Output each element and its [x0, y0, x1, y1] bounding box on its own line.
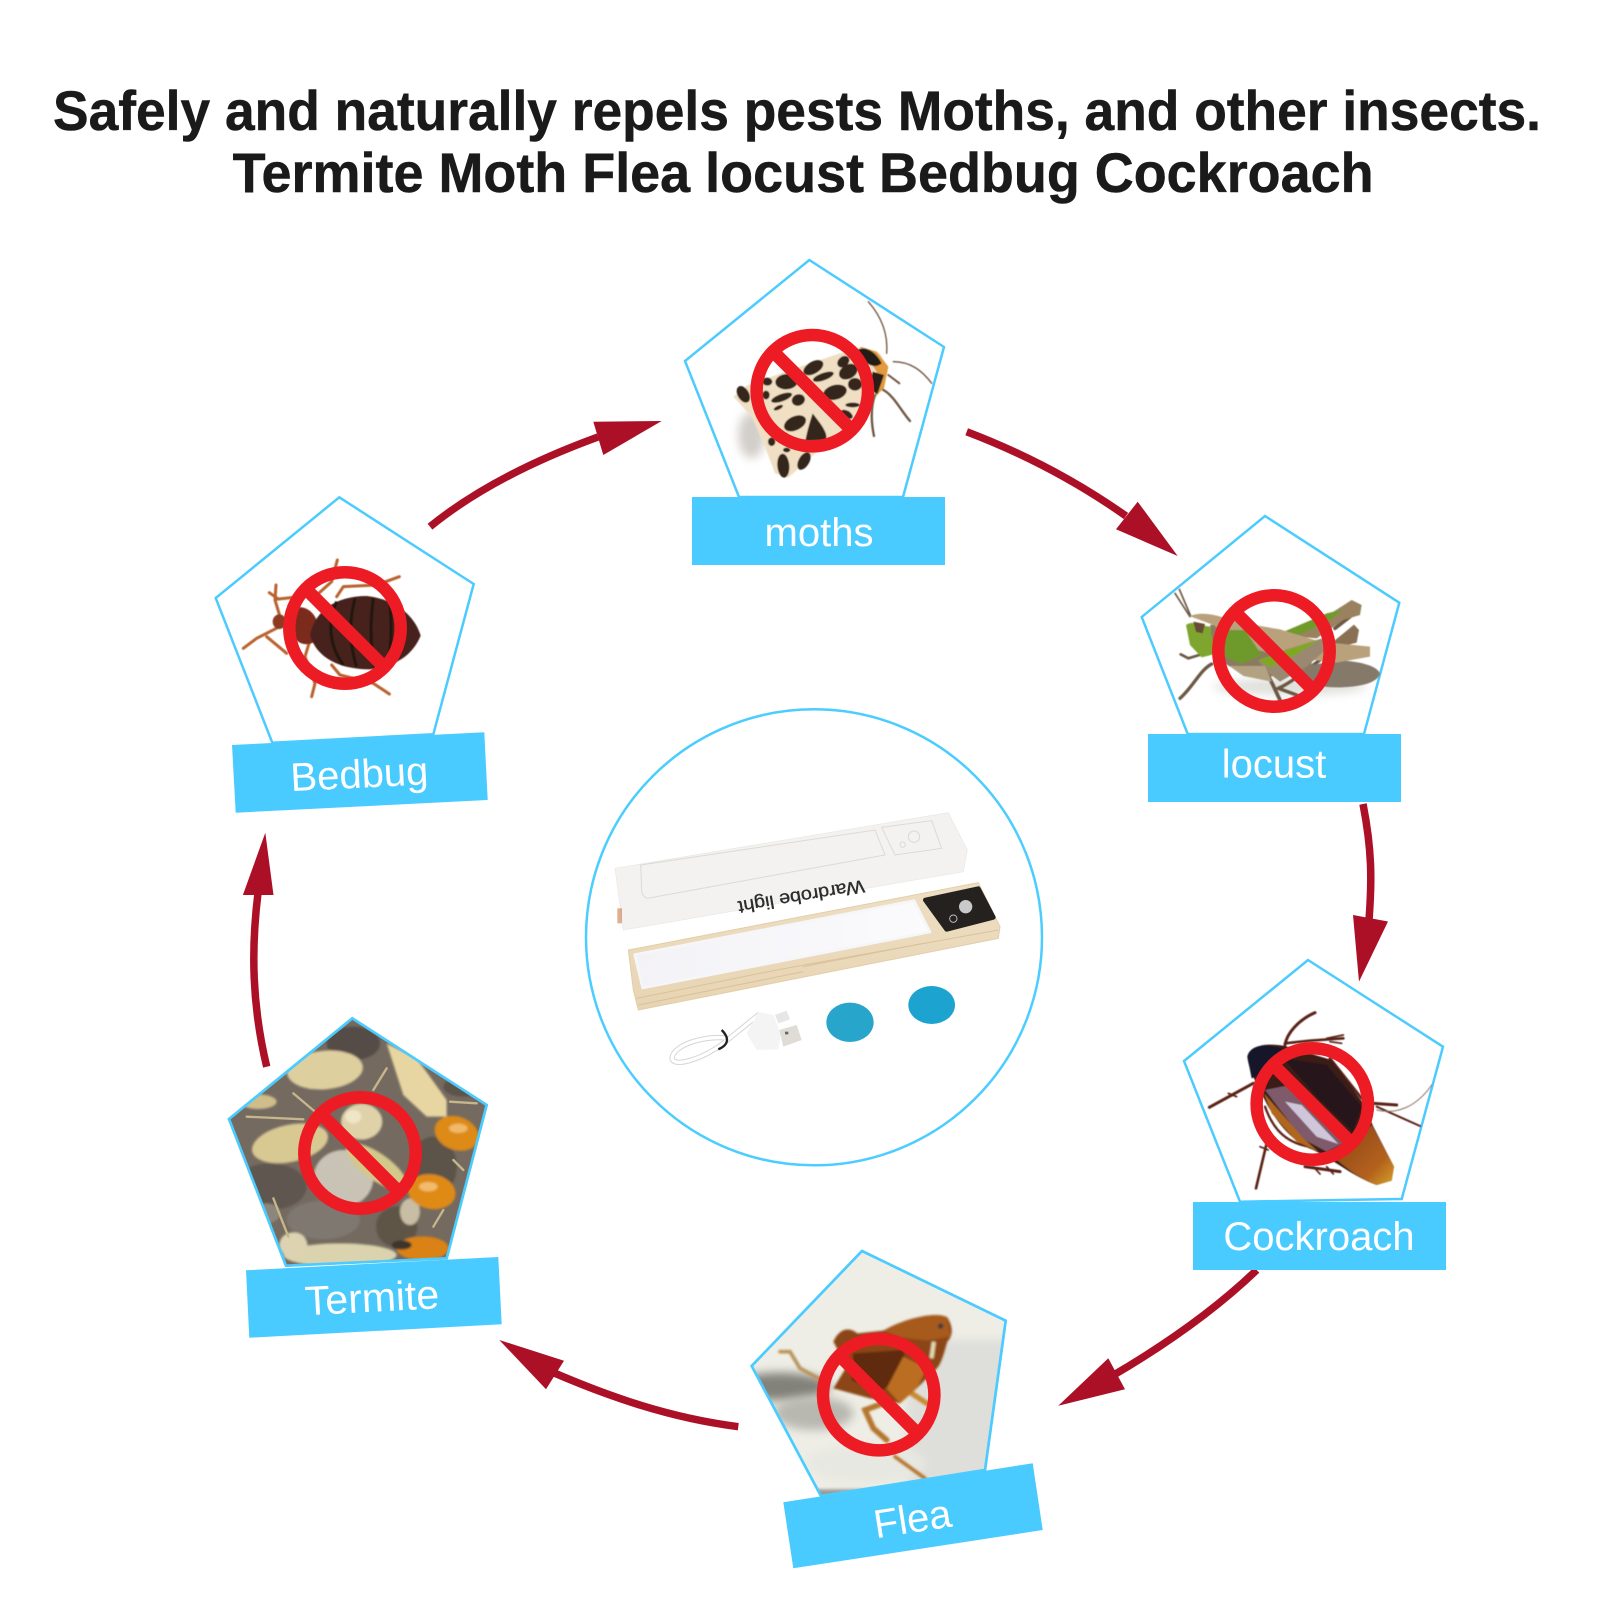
label: cockroach: Cockroach [1223, 1215, 1415, 1259]
icon: termite photo [220, 1010, 493, 1273]
icon: bedbug [243, 560, 421, 697]
label: termite [246, 1257, 502, 1338]
icon: prohibition sign [304, 1097, 416, 1209]
arrow: moths to locust [967, 432, 1178, 556]
usb cable [672, 1011, 802, 1062]
icon: moth [733, 302, 932, 478]
icon: prohibition sign [1257, 1048, 1368, 1160]
icon: prohibition sign [757, 335, 868, 446]
label: cockroach [1193, 1202, 1446, 1270]
product photo [615, 813, 1000, 1062]
box [615, 813, 967, 930]
label: moths: moths [765, 511, 873, 555]
title: Termite Moth Flea locust Bedbug Cockroach [233, 141, 1374, 204]
label: bedbug: Bedbug [289, 749, 429, 800]
icon: prohibition sign [1218, 595, 1330, 707]
icon: flea photo [750, 1249, 1008, 1496]
icon: prohibition sign [289, 572, 401, 684]
icon: locust [1175, 589, 1380, 700]
arrow: bedbug to moths [430, 421, 662, 527]
panel: locust [1142, 516, 1401, 802]
panel: cockroach [1184, 960, 1446, 1270]
adhesive pads [826, 986, 955, 1042]
arrow: termite to bedbug [243, 833, 274, 1067]
label: locust [1148, 734, 1401, 802]
panel: center product circle [586, 709, 1042, 1165]
label: locust: locust [1222, 743, 1326, 787]
arrow: flea to termite [499, 1340, 738, 1427]
label: flea: Flea [871, 1492, 955, 1547]
icon: prohibition sign [823, 1339, 934, 1450]
title [53, 79, 1541, 204]
label: bedbug [232, 732, 488, 813]
label: termite: Termite [304, 1271, 440, 1324]
title: Safely and naturally repels pests Moths, and other insects. [53, 79, 1541, 142]
arrow: locust to cockroach [1353, 804, 1388, 982]
panel: flea [730, 1240, 1043, 1568]
arrow: cockroach to flea [1058, 1270, 1257, 1406]
panel: termite [220, 1010, 502, 1338]
label: moths [692, 497, 945, 565]
product text: Wardrobe light [736, 876, 866, 917]
icon: cockroach [1209, 1013, 1432, 1188]
wardrobe light bar [628, 883, 1000, 1010]
label: flea [783, 1463, 1043, 1568]
panel: moths [685, 260, 945, 565]
panel: bedbug [216, 497, 488, 813]
